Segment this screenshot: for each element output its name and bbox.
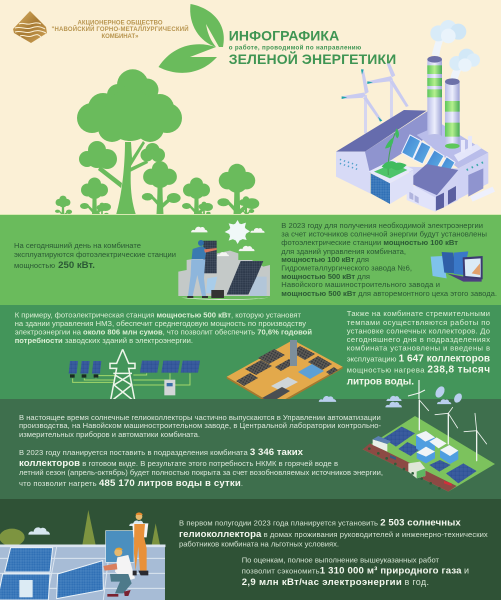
text: 500 kW station example: электроэнергии на около 806 млн сумов, что позволит обеспечить 70,6% годовой <box>15 328 312 336</box>
background bush, cones and clouds <box>0 510 160 546</box>
text: 500 kW station example: на здании управления НМЗ, обеспечит среднегодовую мощность по производству <box>15 319 306 328</box>
text: solar collectors: сегодняшнего дня в подразделениях <box>347 335 490 344</box>
text: solar collectors: эксплуатацию 1 647 коллекторов <box>347 354 490 364</box>
smoke clouds <box>430 20 480 82</box>
panel: band 2, medium green <box>0 305 501 399</box>
text: collector production: что позволит нагреть 485 170 литров воды в сутки. <box>19 478 243 489</box>
text: 2023 solar plans <box>281 221 497 298</box>
icon: large green leaves <box>158 4 224 73</box>
text: estimated savings <box>242 556 469 588</box>
wiring <box>73 373 190 385</box>
solar modules left <box>69 361 101 374</box>
text: collector production: летний сезон (апрель-октябрь) будет полностью покрыта за счет возобновляемых источников энергии, <box>19 468 383 477</box>
text: current capacity: На сегодняшний день на комбинате <box>14 241 141 250</box>
chimneys <box>427 56 482 162</box>
title: о работе, проводимой по направлению <box>229 45 362 52</box>
text: 2023 solar plans: мощностью 500 кВт для авторемонтного цеха этого завода. <box>281 289 497 298</box>
rooftop <box>0 545 165 600</box>
diagram: solar power grid <box>69 349 200 400</box>
roadside trees <box>368 447 441 490</box>
vehicles <box>373 436 452 486</box>
company name: КОМБИНАТ» <box>102 34 139 40</box>
text: collector production: В настоящее время солнечные гелиоколлекторы частично выпускаются в Управлении автоматизации <box>19 413 381 422</box>
text: solar collectors <box>347 309 490 388</box>
inverter <box>164 380 175 395</box>
text: collector production: В 2023 году планируется поставить в подразделения комбината 3 346 таких <box>19 447 304 458</box>
text: 2023 solar plans: за счет источников солнечной энергии будут установлены <box>281 230 487 238</box>
text: 2023 solar plans: фотоэлектрические станции мощностью 100 кВт <box>281 238 458 247</box>
ground line <box>0 214 501 215</box>
wind turbines <box>342 63 409 133</box>
panel: band 3, dark green <box>0 399 501 499</box>
worker <box>187 240 217 298</box>
clouds at top <box>319 396 451 407</box>
text: 500 kW station example: потребности заводских зданий в электроэнергии. <box>15 336 193 345</box>
icon: solar panels and tablet <box>431 251 483 282</box>
text: 2023 solar plans: мощностью 500 кВт для <box>281 272 370 281</box>
solar modules right <box>140 361 200 373</box>
text: 2023 solar plans: для зданий управления комбината, <box>281 247 406 256</box>
text: solar collectors: комбината установлены и введены в <box>347 344 490 352</box>
title <box>229 28 396 67</box>
text: solar collectors: установке солнечных коллекторов. До <box>347 326 490 336</box>
illustration: solar panel installer <box>178 220 270 300</box>
plant box <box>368 128 413 204</box>
text: first half 2023 installations <box>179 518 488 549</box>
main block <box>407 124 495 203</box>
text: current capacity: мощностью 250 кВт. <box>14 260 95 271</box>
text: collector production <box>19 413 383 489</box>
transmission tower <box>110 349 135 400</box>
text: solar collectors: Также на комбинате стремительными <box>347 309 490 318</box>
text: first half 2023 installations: гелиоколлектора в домах проживания руководителей и инженерно-технических <box>179 529 488 540</box>
text: first half 2023 installations: В первом полугодии 2023 года планируется установить 2 503 солнечных <box>179 518 461 528</box>
panel: band 4, darkest green <box>0 499 501 600</box>
text: solar collectors: мощностью нагрева 238,8 тысяч <box>347 365 490 376</box>
inverter boxes <box>70 374 98 378</box>
small turbine and clouds top of park <box>386 380 464 404</box>
text: solar collectors: темпами осуществляются работы по <box>347 318 490 327</box>
standing worker <box>132 512 148 575</box>
text: estimated savings: 2,9 млн кВт/час электроэнергии в год. <box>242 577 429 588</box>
road <box>363 443 457 492</box>
text: current capacity: эксплуатируются фотоэлектрические станции <box>14 250 176 259</box>
text: 2023 solar plans: мощностью 100 кВт для <box>281 255 369 264</box>
illustration: isometric solar plant <box>227 340 343 407</box>
big tree <box>77 69 182 215</box>
text: estimated savings: По оценкам, полное выполнение вышеуказанных работ <box>242 556 440 564</box>
ground <box>179 297 270 300</box>
city silhouette <box>178 251 270 296</box>
land <box>363 416 495 492</box>
text: 500 kW station example: К примеру, фотоэлектрическая станция мощностью 500 кВт, которую установят <box>15 310 302 320</box>
text: collector production: измерительных приборов и автоматики комбината. <box>19 430 200 439</box>
solar fields <box>383 427 477 483</box>
standing panel <box>106 531 134 562</box>
background: cream header <box>0 0 501 215</box>
buildings <box>416 431 458 464</box>
clouds and sun <box>191 220 265 256</box>
solar panels on roof <box>402 135 455 178</box>
illustration: green trees <box>55 69 259 236</box>
small annex <box>407 164 458 212</box>
text: first half 2023 installations: работников комбината на льготных условиях. <box>179 540 339 549</box>
text: collector production: производства, на Навойском машиностроительном заводе, в Центральной лаборатории контрольно- <box>19 421 381 430</box>
rooftop panels <box>0 548 103 600</box>
text: 2023 solar plans: В 2023 году для получения необходимой электроэнергии <box>281 221 483 230</box>
kneeling worker <box>103 548 135 597</box>
illustration: factory <box>336 20 495 212</box>
text: collector production: коллекторов в готовом виде. В результате этого потребность НКМК в горячей воде в <box>19 458 338 469</box>
illustration: green energy park <box>319 396 495 492</box>
illustration: rooftop solar workers <box>0 510 165 600</box>
left hall <box>336 110 428 193</box>
panel: band 1, light green <box>0 215 501 305</box>
text: 500 kW station example <box>15 310 312 345</box>
panel held by worker <box>203 241 217 273</box>
text: current capacity <box>14 241 176 271</box>
text: 2023 solar plans: Гидрометаллургического завода №6, <box>281 264 412 272</box>
company name: АКЦИОНЕРНОЕ ОБЩЕСТВО <box>78 20 163 26</box>
small trees <box>55 161 259 236</box>
text: solar collectors: литров воды. <box>347 376 414 388</box>
logo emblem <box>13 11 47 43</box>
support and large solar panel <box>227 261 267 296</box>
wind turbines <box>419 400 487 461</box>
title: ИНФОГРАФИКА <box>229 28 339 44</box>
text: estimated savings: позволит сэкономить1 310 000 м³ природного газа и <box>242 565 469 576</box>
company name <box>52 20 188 40</box>
boards and toolbox <box>206 277 217 293</box>
text: 2023 solar plans: Навойского машиностроительного завода и <box>281 280 440 289</box>
title: ЗЕЛЕНОЙ ЭНЕРГЕТИКИ <box>229 50 396 67</box>
company name: "НАВОЙСКИЙ ГОРНО-МЕТАЛЛУРГИЧЕСКИЙ <box>52 25 188 33</box>
